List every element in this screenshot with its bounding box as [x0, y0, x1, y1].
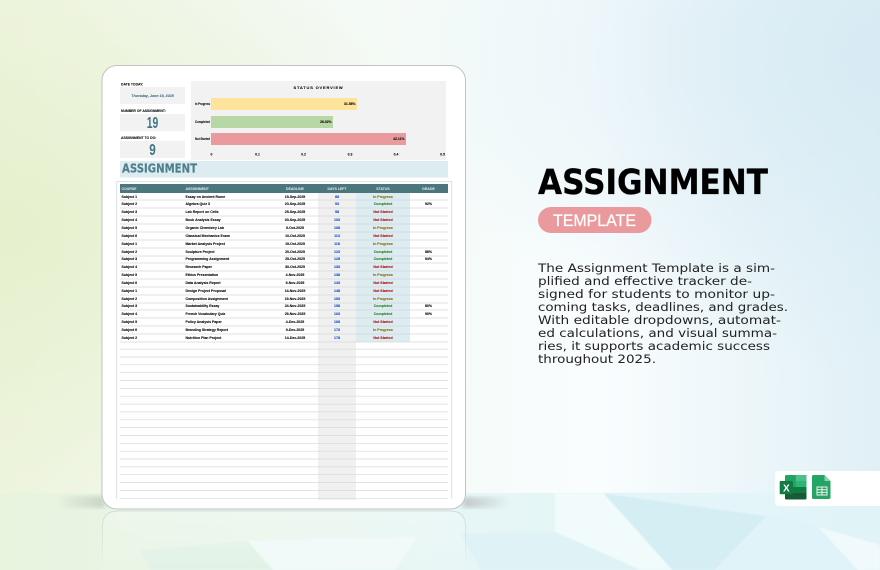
- table rows: Subject 5: [122, 226, 137, 230]
- table rows: Subject 4: [122, 218, 137, 222]
- to do value box: [120, 141, 185, 158]
- table rows: 153: [334, 297, 340, 301]
- table rows: 5-Oct-2025: [286, 226, 304, 230]
- table rows: Programming Assignment: [186, 257, 230, 261]
- table rows: Subject 3: [122, 304, 137, 308]
- number value box: [120, 114, 185, 131]
- table rows: Sculpture Project: [186, 250, 215, 254]
- table rows: 25-Oct-2025: [285, 257, 305, 261]
- table rows: Sustainability Essay: [186, 304, 219, 308]
- tablet reflection: [102, 511, 466, 570]
- table rows: Subject 4: [122, 265, 137, 269]
- table rows: Subject 6: [122, 328, 137, 332]
- bar: in progress: In Progress: [195, 102, 210, 106]
- x axis labels: 0.1: [255, 152, 260, 156]
- table rows: Market Analysis Project: [186, 242, 226, 246]
- table rows: Completed: [374, 250, 392, 254]
- table rows: Subject 6: [122, 281, 137, 285]
- x axis labels: 0.2: [301, 152, 306, 156]
- table rows: Algebra Quiz 3: [186, 202, 210, 206]
- table rows: 118: [334, 242, 340, 246]
- table rows: 128: [334, 257, 340, 261]
- table rows: [122, 195, 433, 340]
- icons strip: [775, 471, 880, 506]
- table rows: In Progress: [373, 226, 393, 230]
- table header: GRADE: [422, 187, 435, 191]
- description paragraph: signed for students to monitor up-: [538, 287, 775, 301]
- table rows: Not Started: [373, 265, 393, 269]
- description paragraph: The Assignment Template is a sim-: [537, 261, 775, 275]
- table rows: Completed: [374, 304, 392, 308]
- days left column shade: [318, 193, 356, 500]
- table header: STATUS: [376, 187, 390, 191]
- table rows: Policy Analysis Paper: [186, 320, 222, 324]
- description paragraph: coming tasks, deadlines, and grades.: [538, 300, 788, 314]
- description paragraph: throughout 2025.: [538, 352, 656, 366]
- table rows: 143: [334, 281, 340, 285]
- table rows: Lab Report on Cells: [186, 210, 219, 214]
- table rows: 4-Nov-2025: [286, 273, 304, 277]
- table rows: 88%: [425, 250, 433, 254]
- table rows: 15-Oct-2025: [285, 242, 305, 246]
- date value box: [120, 87, 185, 104]
- table rows: Research Paper: [186, 265, 213, 269]
- status column shade: [356, 193, 410, 342]
- table rows: Not Started: [373, 210, 393, 214]
- table rows: 103: [334, 218, 340, 222]
- table rows: Subject 3: [122, 257, 137, 261]
- assignment heading band: [120, 161, 448, 178]
- table rows: Not Started: [373, 218, 393, 222]
- date value: Thursday, June 19, 2025: [131, 94, 175, 98]
- number label: NUMBER OF ASSIGNMENT:: [121, 109, 166, 113]
- bar chart: status overview: [191, 81, 446, 160]
- title: ASSIGNMENT: [538, 163, 768, 203]
- table rows: 29-Nov-2025: [285, 312, 305, 316]
- table rows: Not Started: [373, 289, 393, 293]
- table rows: 88: [335, 195, 339, 199]
- table rows: Essay on Ancient Rome: [186, 195, 225, 199]
- date today block: [120, 82, 185, 104]
- template pill: [538, 207, 652, 233]
- table header: DAYS LEFT: [327, 187, 347, 191]
- description paragraph: [537, 261, 788, 366]
- bar: not started: Not Started: [195, 137, 210, 141]
- table rows: Subject 2: [122, 250, 137, 254]
- table rows: 158: [334, 304, 340, 308]
- table rows: Completed: [374, 312, 392, 316]
- x axis labels: 0: [211, 152, 213, 156]
- table rows: 148: [334, 289, 340, 293]
- table rows: 9-Nov-2025: [286, 281, 304, 285]
- table rows: 30-Oct-2025: [285, 265, 305, 269]
- table rows: Subject 3: [122, 210, 137, 214]
- bar: completed: Completed: [195, 120, 210, 124]
- table header: ASSIGNMENT: [186, 187, 210, 191]
- table rows: Nutrition Plan Project: [186, 336, 222, 340]
- x axis labels: 0.3: [348, 152, 352, 156]
- table rows: 30-Sep-2025: [285, 218, 305, 222]
- table rows: 92%: [425, 202, 433, 206]
- table rows: Not Started: [373, 336, 393, 340]
- table rows: Subject 5: [122, 273, 137, 277]
- table rows: In Progress: [373, 242, 393, 246]
- bar: not started: [195, 133, 406, 145]
- bar: in progress: 31.58%: [344, 102, 356, 106]
- table rows: 94%: [425, 257, 433, 261]
- table rows: Completed: [374, 202, 392, 206]
- table rows: Data Analysis Report: [186, 281, 221, 285]
- table rows: 113: [334, 234, 340, 238]
- table rows: Subject 6: [122, 234, 137, 238]
- table rows: Not Started: [373, 234, 393, 238]
- assignment to do block: [120, 136, 185, 159]
- table rows: 14-Nov-2025: [285, 289, 305, 293]
- bar: not started: 42.11%: [393, 137, 404, 141]
- table rows: 25-Sep-2025: [285, 210, 305, 214]
- table rows: In Progress: [373, 297, 393, 301]
- table rows: 98: [335, 210, 339, 214]
- bar: completed: 26.32%: [320, 120, 332, 124]
- description paragraph: ed calculations, and visual summa-: [538, 326, 777, 340]
- table rows: Classical Mechanics Exam: [186, 234, 230, 238]
- table rows: Subject 1: [122, 242, 137, 246]
- table rows: 178: [334, 336, 340, 340]
- table rows: Subject 5: [122, 320, 137, 324]
- table rows: 173: [334, 328, 340, 332]
- table rows: Subject 4: [122, 312, 137, 316]
- date label: DATE TODAY:: [121, 82, 143, 86]
- table rows: French Vocabulary Quiz: [186, 312, 226, 316]
- table rows: 108: [334, 226, 340, 230]
- table rows: Composition Assignment: [186, 297, 229, 301]
- assignment heading band: ASSIGNMENT: [122, 161, 197, 176]
- icon: excel: X: [783, 483, 790, 494]
- table rows: Subject 2: [122, 336, 137, 340]
- number value: 19: [147, 115, 158, 132]
- table rows: In Progress: [373, 328, 393, 332]
- table rows: 10-Oct-2025: [285, 234, 305, 238]
- table rows: 93: [335, 202, 339, 206]
- table rows: 24-Nov-2025: [285, 304, 305, 308]
- bar: in progress: [195, 98, 357, 110]
- bar: completed: [195, 116, 333, 128]
- table rows: 168: [334, 320, 340, 324]
- to do value: 9: [149, 142, 156, 159]
- to do label: ASSIGNMENT TO DO:: [121, 136, 156, 140]
- table header: COURSE: [122, 187, 137, 191]
- table rows: 4-Dec-2025: [286, 320, 304, 324]
- table rows: Subject 1: [122, 289, 137, 293]
- table rows: Design Project Proposal: [186, 289, 226, 293]
- table rows: Subject 2: [122, 297, 137, 301]
- table rows: Ethics Presentation: [186, 273, 218, 277]
- table header: DEADLINE: [286, 187, 305, 191]
- description paragraph: ries, it supports academic success: [538, 339, 770, 353]
- table rows: In Progress: [373, 195, 393, 199]
- description paragraph: With editable dropdowns, automat-: [538, 313, 781, 327]
- table rows: 20-Sep-2025: [285, 202, 305, 206]
- table rows: Book Analysis Essay: [186, 218, 221, 222]
- table rows: 138: [334, 273, 340, 277]
- chart title: STATUS OVERVIEW: [293, 85, 344, 90]
- table header: [120, 184, 448, 193]
- table rows: 163: [334, 312, 340, 316]
- table frame: [117, 182, 452, 499]
- x axis labels: 0.5: [440, 152, 445, 156]
- table rows: 14-Dec-2025: [285, 336, 305, 340]
- x axis labels: 0.4: [394, 152, 398, 156]
- table rows: 15-Sep-2025: [285, 195, 305, 199]
- table rows: Organic Chemistry Lab: [186, 226, 224, 230]
- table rows: Not Started: [373, 281, 393, 285]
- description paragraph: plified and effective tracker de-: [538, 274, 752, 288]
- table rows: 19-Nov-2025: [285, 297, 305, 301]
- table rows: Not Started: [373, 320, 393, 324]
- tablet frame: [102, 66, 466, 509]
- assignment table: [117, 182, 452, 500]
- table rows: Subject 2: [122, 202, 137, 206]
- table rows: 80%: [425, 304, 433, 308]
- table rows: 90%: [425, 312, 433, 316]
- table rows: 133: [334, 265, 340, 269]
- icon: google sheets: [812, 475, 830, 499]
- table rows: 20-Oct-2025: [285, 250, 305, 254]
- table rows: Subject 1: [122, 195, 137, 199]
- number of assignment block: [120, 109, 185, 132]
- table rows: In Progress: [373, 273, 393, 277]
- table rows: 9-Dec-2025: [286, 328, 304, 332]
- table rows: 123: [334, 250, 340, 254]
- table rows: Completed: [374, 257, 392, 261]
- template pill: TEMPLATE: [553, 211, 636, 230]
- x axis labels: [211, 152, 445, 156]
- table rows: Branding Strategy Report: [186, 328, 229, 332]
